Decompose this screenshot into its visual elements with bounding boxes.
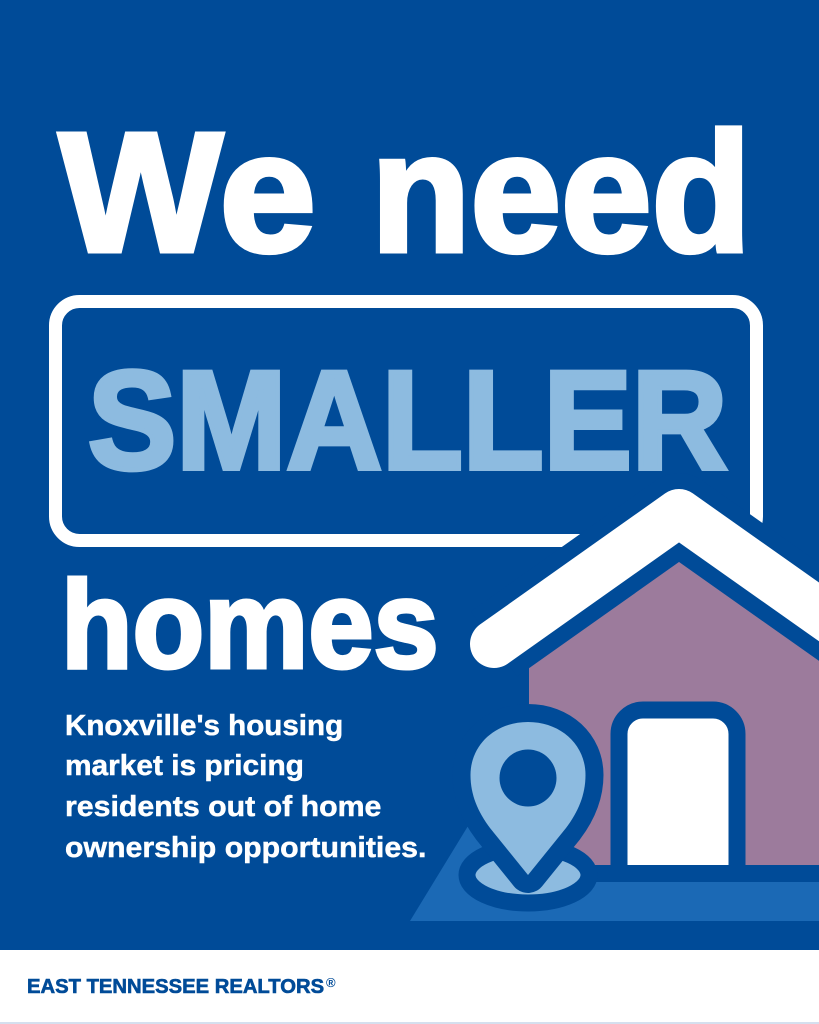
- title: We need: [59, 98, 751, 288]
- title: We need: need: [371, 98, 751, 288]
- title: We need: We: [59, 99, 316, 288]
- heading: homes: homes: [61, 555, 439, 694]
- text block: description: market is pricing: [65, 749, 304, 782]
- text block: description: residents out of home: [65, 791, 381, 823]
- text block: description: Knoxville's housing: [65, 709, 343, 742]
- pin base ellipse: [467, 847, 589, 903]
- heading: SMALLER: SMALLER: [88, 342, 727, 498]
- footer band: [0, 950, 819, 1024]
- registered mark: ®: [326, 975, 336, 990]
- text block: description: [65, 709, 426, 864]
- rounded box outline: [56, 302, 756, 540]
- door: [619, 710, 737, 872]
- house base line: [530, 865, 819, 882]
- house wall: [529, 530, 819, 865]
- text block: description: ownership opportunities.: [65, 832, 426, 864]
- icon: house and location pin: [410, 513, 819, 921]
- ground: [410, 826, 819, 921]
- footer: organisation name: EAST TENNESSEE REALTORS: [27, 976, 324, 998]
- roof: [494, 513, 819, 655]
- icon: location pin: [470, 722, 586, 875]
